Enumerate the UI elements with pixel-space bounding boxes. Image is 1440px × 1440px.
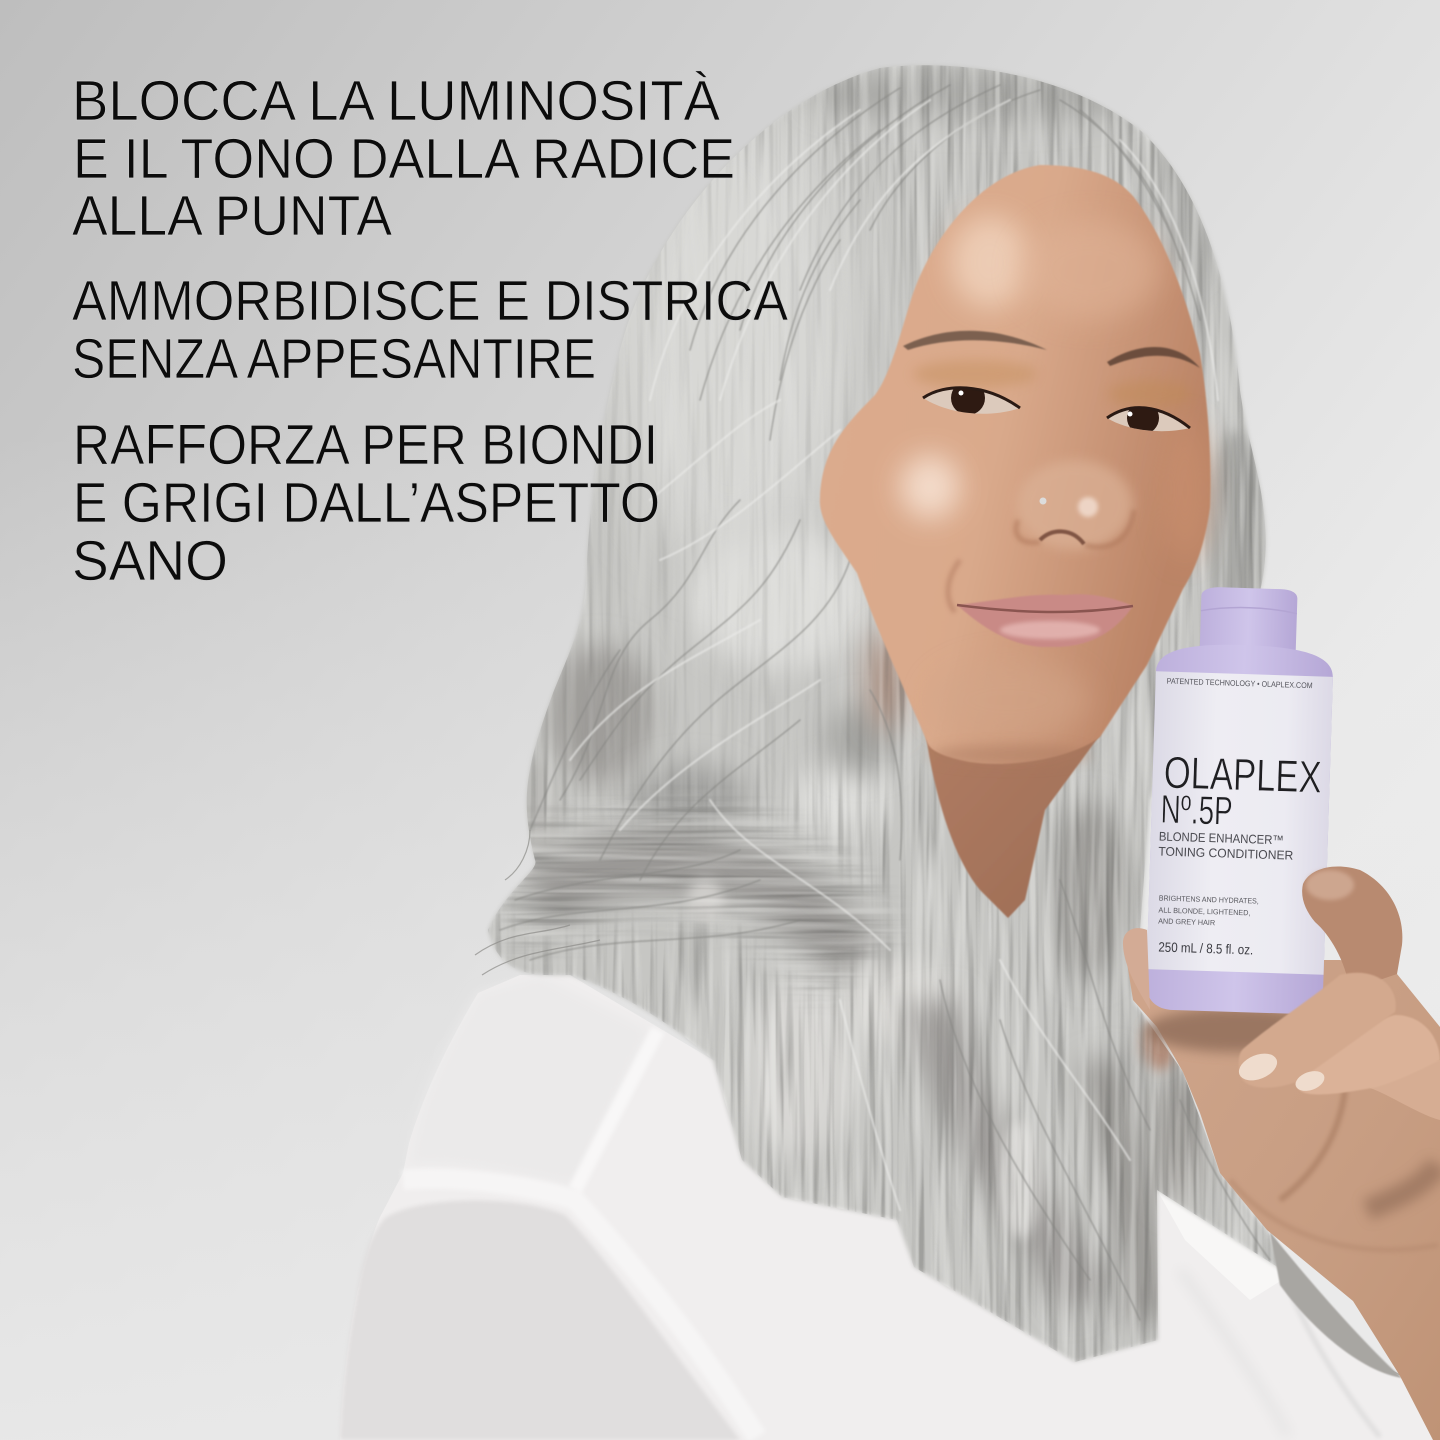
middle finger (1239, 973, 1396, 1088)
flyaway strands (475, 830, 1400, 1375)
shadow under bottle (1145, 1008, 1325, 1052)
benefit three: E GRIGI DALL’ASPETTO (73, 471, 660, 535)
bottle (1145, 585, 1336, 1015)
shirt sleeve (340, 1200, 740, 1440)
eyebrow right (1107, 347, 1200, 368)
eyelid right (1108, 380, 1192, 408)
nail (1293, 1067, 1327, 1095)
bottle cap (1200, 587, 1298, 652)
ring finger band (1370, 1060, 1440, 1120)
forehead highlight (950, 216, 1030, 308)
bottle text: Nº.5P (1160, 788, 1233, 834)
eyebrow left (903, 331, 1047, 350)
collar (1157, 1190, 1290, 1300)
bottle text: AND GREY HAIR (1158, 916, 1216, 927)
benefit three: SANO (72, 529, 228, 593)
hand fingers (1123, 866, 1440, 1120)
benefit two: AMMORBIDISCE E DISTRICA (72, 269, 788, 333)
shirt seam band (403, 1179, 757, 1437)
yoke panel (409, 975, 650, 1185)
bottle text: TONING CONDITIONER (1158, 844, 1293, 863)
bottle text (1155, 677, 1325, 959)
bottle text: BRIGHTENS AND HYDRATES, (1159, 894, 1259, 906)
bottle text: 250 mL / 8.5 fl. oz. (1158, 940, 1254, 957)
index fingertip (1306, 870, 1354, 900)
benefit one: BLOCCA LA LUMINOSITÀ (72, 69, 720, 133)
hair strands (500, 85, 1270, 1320)
eyelid left (913, 360, 1037, 388)
smile crease (948, 560, 960, 612)
bottle text: OLAPLEX (1163, 747, 1323, 803)
shirt (340, 975, 1433, 1440)
benefit two: SENZA APPESANTIRE (72, 327, 596, 391)
thumb (1123, 928, 1150, 1010)
bottle label (1147, 671, 1333, 975)
lips (957, 594, 1133, 647)
benefit one: E IL TONO DALLA RADICE (73, 127, 735, 191)
bottle body (1145, 642, 1334, 1015)
hand back (1125, 950, 1440, 1440)
nose (1016, 460, 1134, 550)
hair behind hand (1270, 1232, 1402, 1378)
shirt seam vertical (575, 1030, 658, 1190)
hair texture (488, 65, 1276, 1362)
nail (1235, 1048, 1281, 1086)
eye left (922, 386, 1021, 414)
benefit three (72, 413, 660, 593)
face (820, 165, 1211, 765)
palm crease (1367, 1165, 1438, 1210)
cheek highlight (900, 455, 960, 519)
benefit two (72, 269, 788, 391)
eye right (1106, 406, 1191, 432)
headline text (72, 69, 788, 593)
bottle text: BLONDE ENHANCER™ (1159, 829, 1284, 847)
bottle text: PATENTED TECHNOLOGY • OLAPLEX.COM (1167, 677, 1313, 690)
little finger (1295, 1015, 1440, 1094)
hair (474, 65, 1401, 1378)
index finger (1302, 866, 1402, 990)
neck (925, 730, 1100, 918)
benefit one (72, 69, 735, 248)
bottle text: ALL BLONDE, LIGHTENED, (1158, 905, 1251, 917)
benefit one: ALLA PUNTA (72, 184, 392, 248)
benefit three: RAFFORZA PER BIONDI (73, 413, 658, 477)
